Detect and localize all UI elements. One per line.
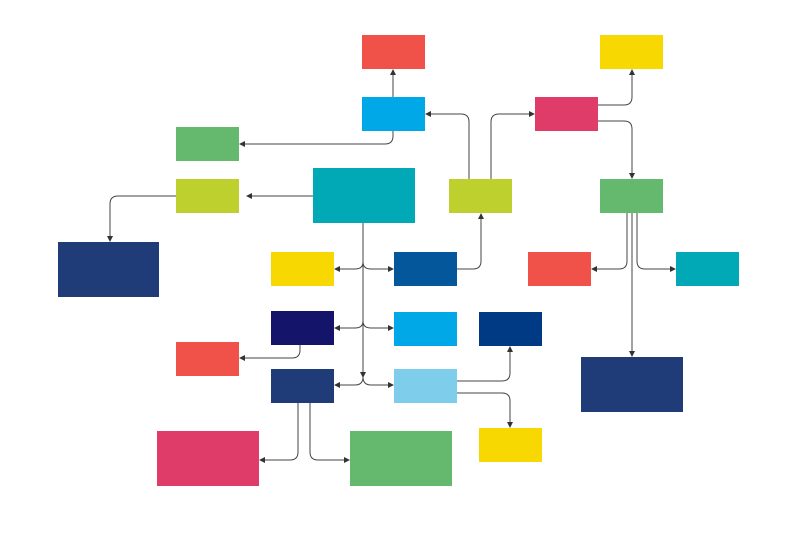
connectors — [110, 70, 675, 460]
boxes — [58, 35, 739, 486]
